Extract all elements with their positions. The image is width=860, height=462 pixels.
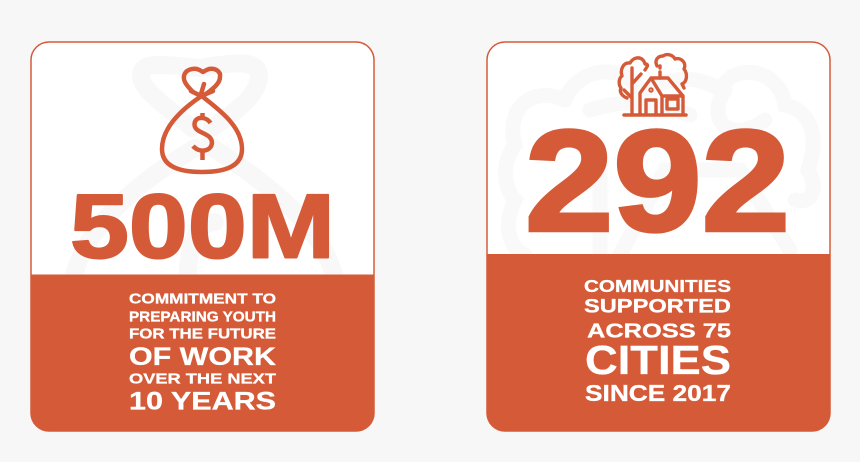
description: communities text: COMMUNITIES — [584, 276, 731, 296]
icon: money bag — [162, 69, 242, 172]
description: communities text — [584, 276, 731, 406]
orange band — [31, 274, 374, 431]
description: commitment text: COMMITMENT TO — [129, 292, 276, 308]
card background — [31, 42, 374, 431]
orange band — [487, 254, 830, 431]
description: commitment text: PREPARING YOUTH — [129, 310, 276, 326]
card background — [487, 42, 830, 431]
watermark: faint money bag — [72, 63, 336, 285]
watermark: faint house and trees — [506, 72, 813, 255]
big number: 500M: 500M — [70, 176, 335, 278]
description: commitment text: FOR THE FUTURE — [129, 327, 276, 343]
description: commitment text: OF WORK — [129, 343, 276, 371]
description: commitment text: OVER THE NEXT — [129, 371, 276, 388]
description: communities text: CITIES — [585, 337, 731, 383]
description: commitment text: 10 YEARS — [129, 388, 276, 416]
panel: 500M commitment — [31, 42, 374, 431]
panel: 292 communities — [487, 42, 830, 431]
description: communities text: SUPPORTED — [584, 296, 731, 317]
description: commitment text — [129, 292, 276, 416]
big number: 292: 292 — [525, 100, 790, 262]
description: communities text: ACROSS 75 — [587, 320, 731, 342]
description: communities text: SINCE 2017 — [585, 380, 731, 406]
icon: house and trees — [619, 55, 686, 115]
